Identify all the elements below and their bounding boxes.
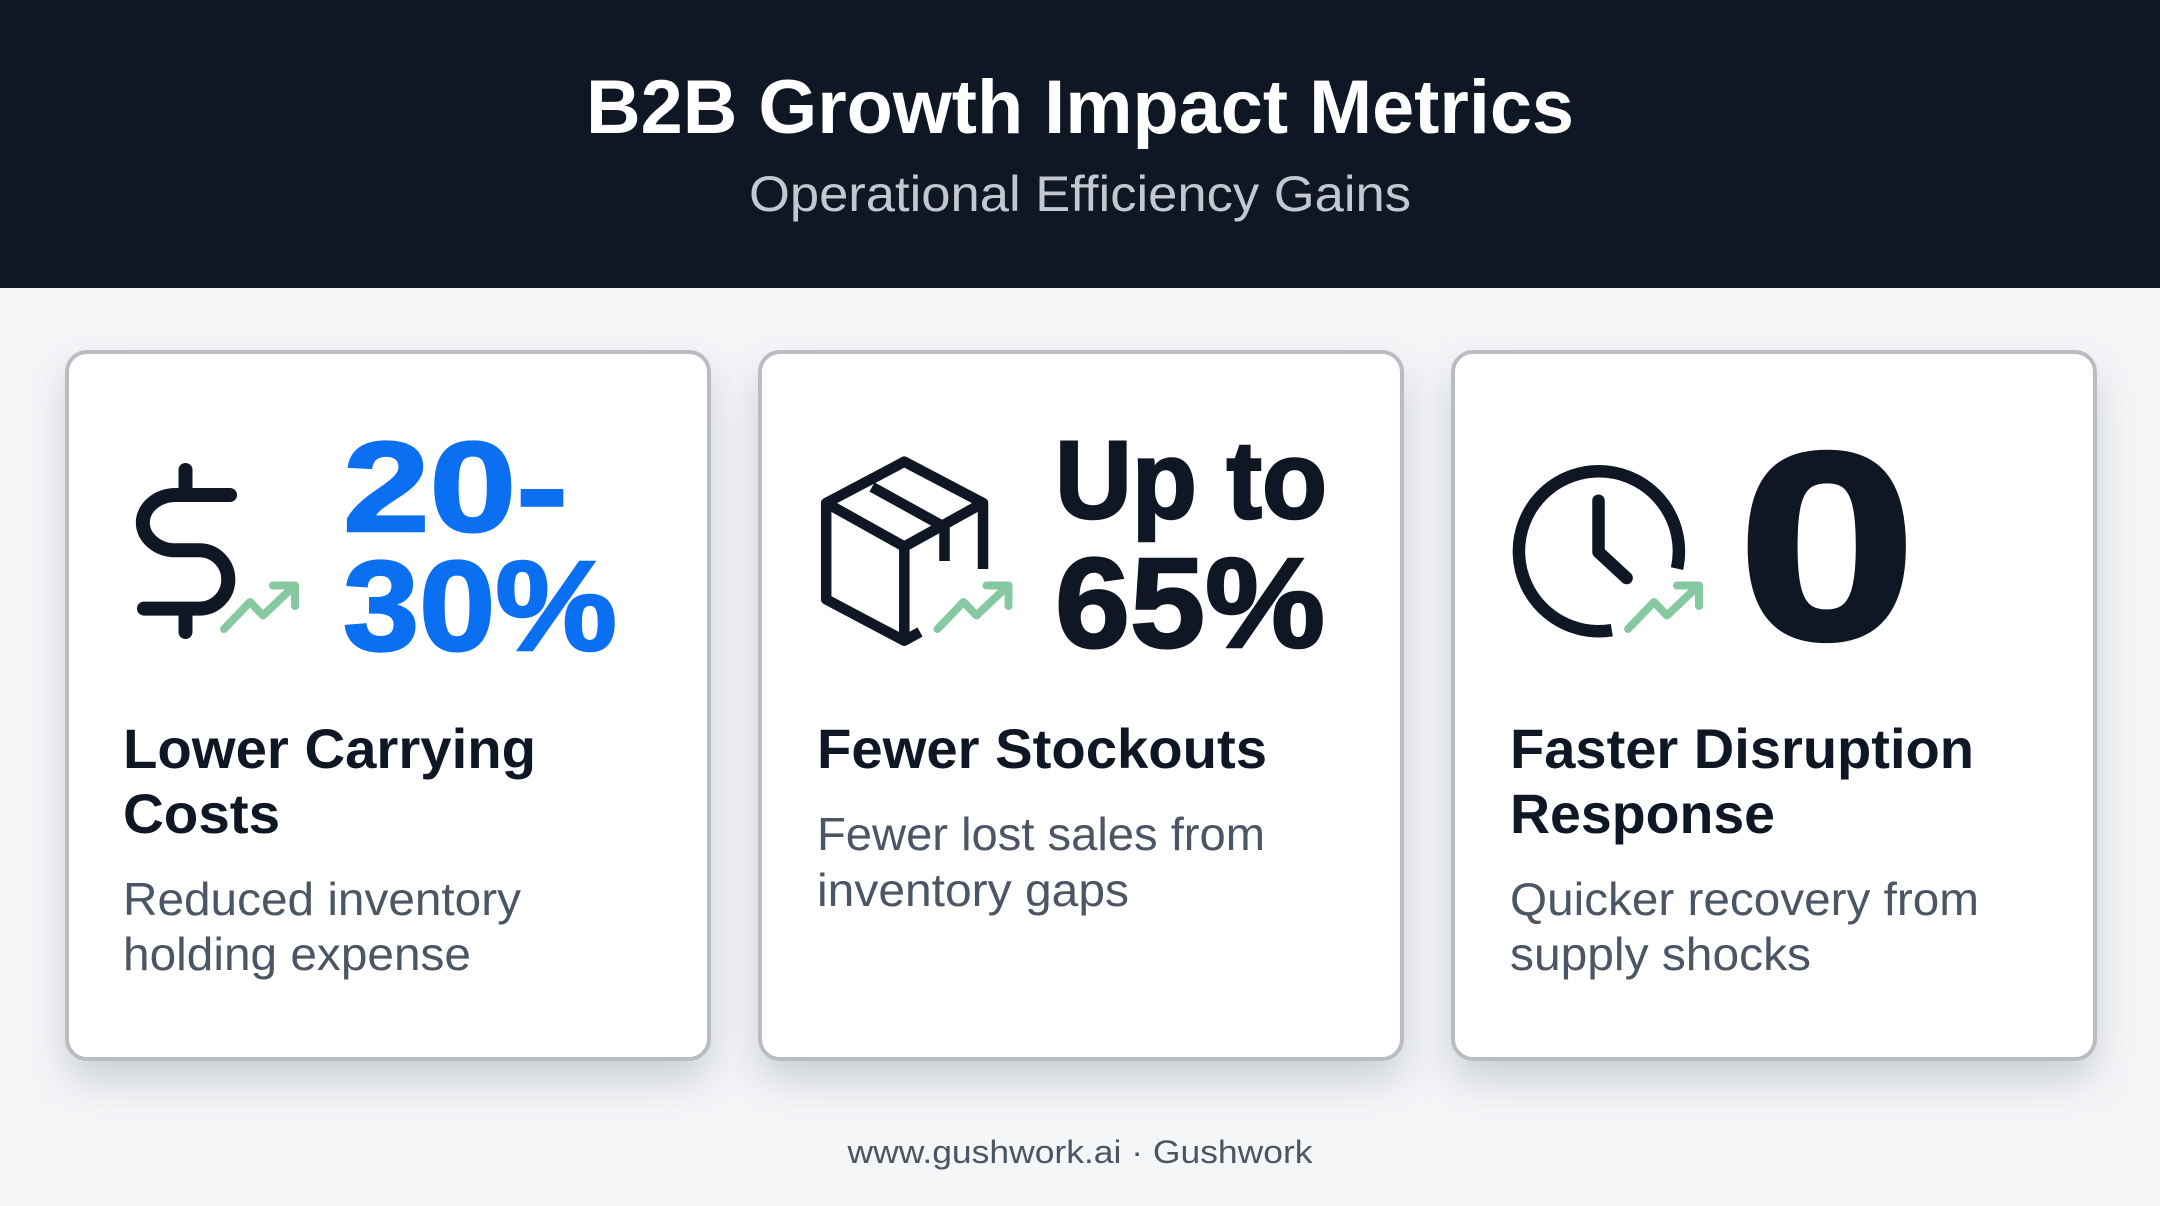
description: holding expense — [123, 928, 471, 980]
metric: up to 65%: Up to — [1055, 419, 1327, 542]
subtitle: Operational Efficiency Gains — [749, 166, 1411, 222]
header band — [0, 0, 2160, 288]
title: B2B Growth Impact Metrics — [586, 65, 1574, 150]
description — [123, 873, 521, 980]
panel: fewer stockouts — [760, 352, 1402, 1059]
panel: lower carrying costs — [67, 352, 709, 1059]
panel: faster disruption response — [1453, 352, 2095, 1059]
metric: up to 65% — [1055, 419, 1327, 675]
description — [817, 808, 1265, 916]
description — [1510, 873, 1979, 980]
description: Quicker recovery from — [1510, 873, 1979, 925]
heading: Lower Carrying — [123, 717, 536, 780]
metric: up to 65%: 65% — [1055, 532, 1325, 675]
metric: 20-30%: 20- — [343, 416, 568, 559]
description: Fewer lost sales from — [817, 808, 1265, 860]
heading: Response — [1510, 782, 1775, 845]
description: inventory gaps — [817, 864, 1129, 916]
heading: Faster Disruption — [1510, 717, 1974, 780]
icon: box with growth arrow — [826, 462, 1008, 641]
metric: 20-30%: 30% — [343, 535, 617, 678]
heading — [123, 717, 536, 845]
metric: 20-30% — [343, 416, 617, 678]
icon: dollar sign with growth arrow — [143, 470, 295, 632]
icon: clock with growth arrow — [1519, 471, 1699, 631]
heading: Costs — [123, 782, 280, 845]
metric: 0: 0 — [1738, 398, 1916, 695]
description: supply shocks — [1510, 928, 1811, 980]
heading — [1510, 717, 1974, 845]
footer source: www.gushwork.ai · Gushwork — [846, 1134, 1314, 1170]
description: Reduced inventory — [123, 873, 521, 925]
heading: Fewer Stockouts — [817, 717, 1267, 780]
